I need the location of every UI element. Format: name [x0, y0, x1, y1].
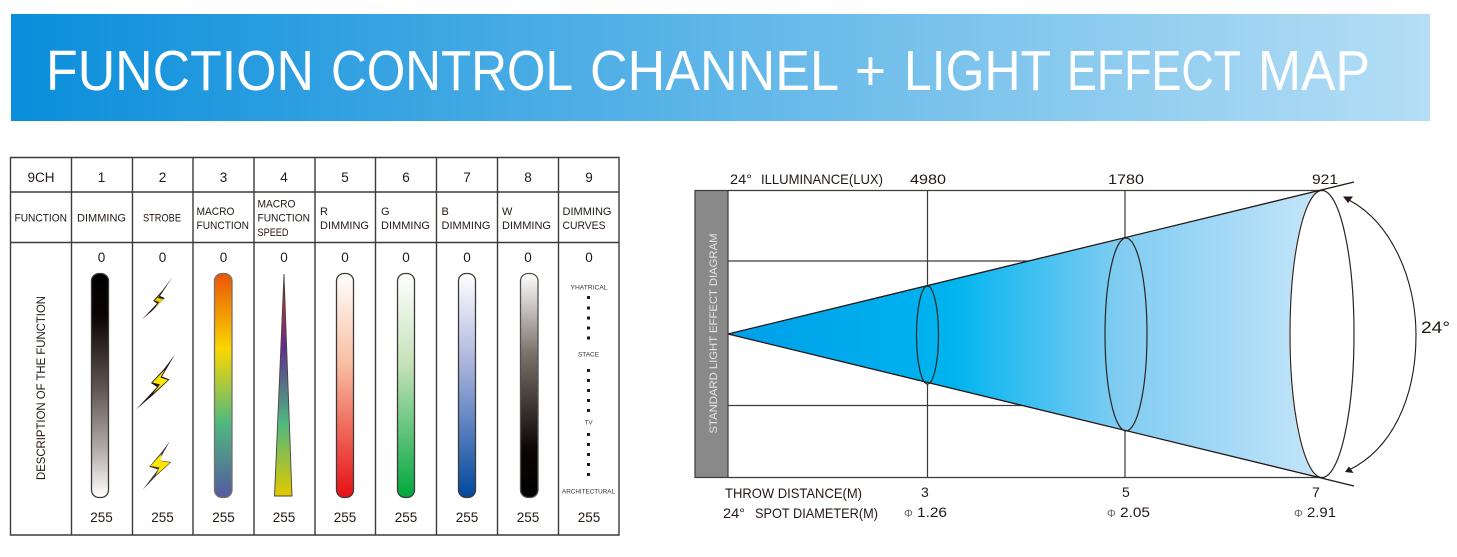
spot diameter row: [723, 504, 1336, 521]
title: CONTROL: [331, 39, 573, 103]
title: EFFECT: [1067, 39, 1241, 103]
range end values: 255: [578, 510, 600, 525]
dimming curves scale: YHATRICAL: [570, 284, 608, 292]
illuminance row: ILLUMINANCE(LUX): [761, 171, 883, 187]
channel number row: 9: [585, 170, 593, 185]
macro function gradient bar: [214, 274, 232, 498]
beam angle label: 24°: [1421, 318, 1450, 337]
range end values: 255: [212, 510, 235, 525]
function name row: FUNCTION: [258, 212, 310, 224]
illuminance row: [730, 171, 1338, 187]
function name row: STROBE: [143, 212, 181, 224]
channel number row: 3: [220, 170, 227, 185]
range end values: 255: [90, 510, 113, 525]
function name row: DIMMING: [442, 220, 490, 232]
function name row: W: [502, 206, 513, 218]
range end values: [90, 510, 600, 525]
range start values: 0: [463, 250, 471, 265]
range start values: 0: [524, 250, 532, 265]
dimming curves scale: ARCHITECTURAL: [562, 488, 615, 496]
dimming curves scale: [562, 284, 615, 496]
function name row: B: [442, 206, 449, 218]
throw distance row: THROW DISTANCE(M): [725, 485, 862, 501]
range end values: 255: [273, 510, 295, 525]
function name row: G: [381, 206, 390, 218]
channel number row: 5: [341, 170, 349, 185]
title banner: [11, 14, 1430, 121]
range start values: 0: [341, 250, 349, 265]
description label: DESCRIPTION OF THE FUNCTION: [36, 296, 48, 480]
channel number row: 4: [280, 170, 288, 185]
illuminance row: 4980: [910, 171, 946, 187]
strobe lightning icons: [136, 277, 175, 490]
function name row: R: [320, 206, 328, 218]
dimming gradient bar: [92, 274, 108, 498]
title: MAP: [1258, 39, 1370, 103]
range start values: 0: [98, 250, 105, 265]
range end values: 255: [517, 510, 539, 525]
title: LIGHT: [904, 39, 1051, 103]
title: FUNCTION: [46, 39, 314, 103]
channel number row: 2: [159, 170, 166, 185]
panel: light effect diagram: [695, 171, 1450, 521]
spot diameter row: SPOT DIAMETER(M): [755, 505, 878, 521]
function name row: CURVES: [562, 220, 606, 232]
function name row: FUNCTION: [196, 220, 249, 232]
spot diameter row: Φ: [1294, 508, 1303, 520]
range end values: 255: [456, 510, 478, 525]
spot ellipse at 5 m: [1105, 238, 1147, 431]
throw distance row: 5: [1122, 484, 1130, 500]
macro speed triangle: [274, 274, 292, 496]
function name row: DIMMING: [381, 220, 430, 232]
throw distance row: [725, 484, 1320, 501]
throw distance row: 7: [1312, 484, 1320, 500]
spot diameter row: Φ: [904, 508, 913, 520]
beam edges: [728, 182, 1354, 486]
dimming curves scale: TV: [584, 420, 593, 426]
range end values: 255: [151, 510, 174, 525]
spot diameter row: 2.91: [1307, 504, 1336, 520]
range end values: 255: [334, 510, 356, 525]
function name row: DIMMING: [320, 220, 369, 232]
function name row: SPEED: [258, 227, 289, 239]
title: +: [855, 39, 886, 103]
red dimming bar: [336, 274, 354, 498]
channel number row: [27, 170, 593, 185]
channel number row: 7: [463, 170, 471, 185]
dimming curves scale: STACE: [578, 352, 600, 358]
function name row: DIMMING: [77, 212, 126, 224]
function name row: DIMMING: [562, 206, 612, 218]
function name row: DIMMING: [502, 220, 551, 232]
channel number row: 1: [98, 170, 105, 185]
spot ellipse at 7 m: [1290, 190, 1354, 478]
channel number row: 6: [402, 170, 410, 185]
panel: function control channel table: [10, 158, 619, 535]
range end values: 255: [395, 510, 417, 525]
channel number row: 9CH: [27, 170, 55, 185]
throw distance row: 3: [921, 484, 929, 500]
green dimming bar: [398, 274, 414, 498]
blue dimming bar: [458, 274, 476, 498]
function name row: MACRO: [196, 206, 235, 218]
side label band: [695, 190, 728, 478]
function name row: MACRO: [258, 198, 296, 210]
illuminance row: 921: [1312, 171, 1338, 187]
light beam cone: [728, 190, 1321, 478]
beam angle arrow: [1343, 196, 1416, 473]
range start values: 0: [402, 250, 410, 265]
spot diameter row: 24°: [723, 505, 745, 521]
title: CHANNEL: [590, 39, 839, 103]
function name row: FUNCTION: [14, 212, 67, 224]
range start values: [98, 250, 593, 265]
title: [46, 39, 1370, 103]
range start values: 0: [585, 250, 593, 265]
white dimming bar: [520, 274, 538, 498]
function name row: [14, 198, 612, 239]
range start values: 0: [220, 250, 227, 265]
spot ellipse at 3 m: [916, 286, 938, 384]
illuminance row: 1780: [1108, 171, 1144, 187]
illuminance row: 24°: [730, 171, 752, 187]
side label band: STANDARD LIGHT EFFECT DIAGRAM: [708, 233, 720, 434]
spot diameter row: Φ: [1107, 508, 1116, 520]
spot diameter row: 2.05: [1120, 504, 1150, 520]
range start values: 0: [280, 250, 288, 265]
channel number row: 8: [524, 170, 532, 185]
range start values: 0: [159, 250, 166, 265]
spot diameter row: 1.26: [917, 504, 947, 520]
